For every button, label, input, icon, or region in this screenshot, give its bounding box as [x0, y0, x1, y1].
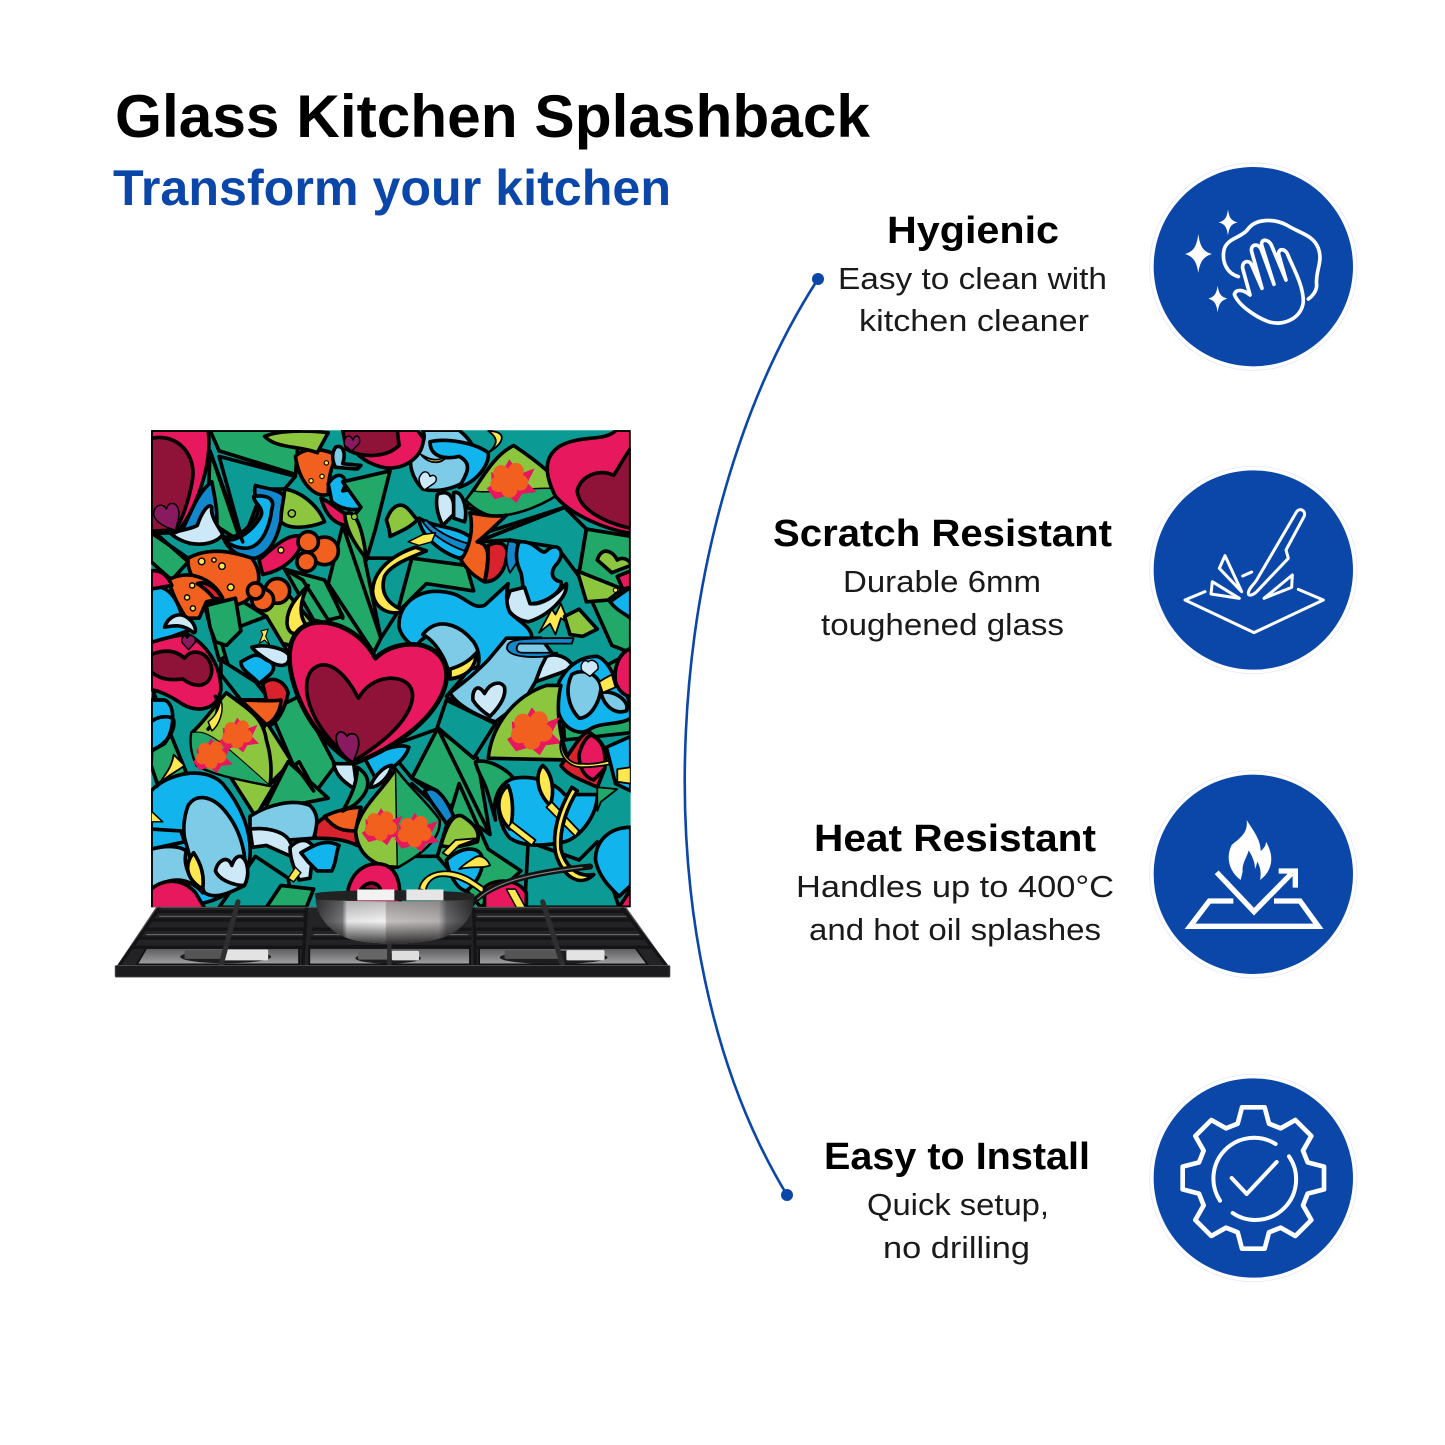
- feature: Easy to Install: [824, 1136, 1090, 1265]
- subtitle: Transform your kitchen: [113, 160, 671, 216]
- top-left heart: [151, 430, 209, 533]
- central big red heart: [289, 622, 447, 764]
- feature: Scratch Resistant: Durable 6mm: [843, 564, 1041, 599]
- mid-left red heart: [151, 635, 221, 709]
- feature: Scratch Resistant: [773, 513, 1112, 642]
- pan inside rim: [315, 890, 474, 901]
- icon: gear with check: [1150, 1074, 1357, 1282]
- left edge fragments: [151, 587, 188, 642]
- hob body: [117, 907, 669, 967]
- green arrow leaves top centre: [343, 471, 390, 560]
- right red heart fragment: [615, 648, 631, 696]
- feature: Easy to Install: Quick setup,: [867, 1187, 1049, 1222]
- top dot: [812, 273, 824, 285]
- splashback artwork panel: [151, 430, 631, 909]
- bottom hearts: [151, 881, 205, 909]
- feature: Heat Resistant: Heat Resistant: [814, 818, 1096, 860]
- top right lime leaf and berry: [466, 445, 565, 515]
- bottom centre leaf with berries: [355, 769, 439, 867]
- top centre blue forms: [410, 430, 476, 490]
- feature: Hygienic: Hygienic: [887, 210, 1059, 252]
- burners: [180, 949, 607, 964]
- product illustration: splashback above hob: [115, 430, 670, 977]
- big central-right blue heart: [399, 584, 532, 722]
- hob front edge: [115, 965, 670, 977]
- lime leaf with berry, lower right: [488, 685, 569, 760]
- top centre red heart: [343, 430, 423, 468]
- feature: Hygienic: kitchen cleaner: [859, 303, 1089, 338]
- pan body: [315, 899, 474, 943]
- vertical grate bars: [221, 902, 563, 965]
- top centre orange fruit: [295, 449, 337, 495]
- grates: [119, 909, 666, 965]
- feature: Heat Resistant: and hot oil splashes: [809, 912, 1101, 947]
- feature: Hygienic: Easy to clean with: [838, 261, 1107, 296]
- lime leaf with berries, left: [191, 693, 271, 785]
- feature: Easy to Install: no drilling: [883, 1230, 1030, 1265]
- green leaf with yellow dot, right: [577, 571, 623, 602]
- burner wells: [137, 948, 647, 964]
- lower-left big blue heart: [151, 773, 250, 904]
- feature: Hygienic: [838, 210, 1107, 338]
- bolts right: [539, 604, 569, 635]
- top right red heart: [547, 430, 631, 533]
- feature: Scratch Resistant: Scratch Resistant: [773, 513, 1112, 555]
- bottom centre fruit and wings: [314, 807, 361, 845]
- bottom yellow vines and yellow leaf: [441, 815, 478, 847]
- frying pan: [315, 867, 590, 943]
- green leaves left: [206, 598, 241, 645]
- pink and orange blob: [188, 551, 259, 605]
- feature: Heat Resistant: Handles up to 400°C: [796, 869, 1114, 904]
- right blue heart: [556, 656, 631, 732]
- feature: Easy to Install: Easy to Install: [824, 1136, 1090, 1178]
- icon: flame on surface: [1150, 771, 1357, 978]
- hob with burners and grates: [115, 902, 670, 977]
- bottom dot: [781, 1189, 793, 1201]
- feature: Scratch Resistant: toughened glass: [821, 607, 1064, 642]
- yellow and blue lower right: [498, 778, 597, 845]
- blue cloud right: [517, 542, 561, 604]
- top-left blue waves: [183, 482, 217, 544]
- orange red fruit right: [461, 513, 506, 582]
- icon: knife scratching glass: [1150, 466, 1357, 674]
- pan handle: [470, 867, 590, 905]
- blue shape below central heart: [365, 746, 409, 778]
- connector curve: [685, 273, 824, 1201]
- small wing and bolt, left: [252, 646, 290, 665]
- icon: cleaning hand: [1150, 163, 1357, 370]
- title: Glass Kitchen Splashback: [115, 83, 871, 150]
- feature: Heat Resistant: [796, 818, 1114, 947]
- big yellow hook: [373, 547, 426, 613]
